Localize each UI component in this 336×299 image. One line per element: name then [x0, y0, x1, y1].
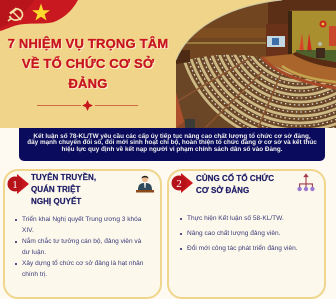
- bullet list: task 1: [15, 216, 143, 278]
- title: VỀ TỔ CHỨC CƠ SỞ: [22, 56, 154, 71]
- summary note panel: [19, 128, 325, 161]
- title: 7 NHIỆM VỤ TRỌNG TÂM: [8, 36, 168, 51]
- heading: task 1: TUYÊN TRUYỀN,: [31, 173, 96, 182]
- number badge 2: [172, 173, 193, 193]
- title: ĐẢNG: [68, 76, 108, 91]
- bullet list: task 1: chính trị.: [22, 271, 47, 278]
- bullet list: task 1: XIV.: [22, 227, 34, 234]
- heading: task 2: [196, 173, 274, 194]
- heading: task 2: CỦNG CỐ TỔ CHỨC: [196, 174, 274, 182]
- panel: task 2: [167, 169, 326, 299]
- title ornament divider: [37, 100, 138, 111]
- header band: beige background: [0, 0, 336, 128]
- bullet list: task 1: dư luận.: [22, 249, 46, 256]
- bullet list: task 2: Nâng cao chất lượng đảng viên.: [187, 230, 280, 237]
- heading: task 1: [31, 172, 96, 206]
- bullet list: task 2: Thực hiện Kết luận số 58-KL/TW.: [187, 215, 284, 222]
- header photo: assembly hall: [176, 0, 336, 128]
- bullet list: task 1: Nắm chắc tư tưởng cán bộ, đảng viên và: [22, 238, 141, 245]
- flag with hammer and sickle and star: [0, 0, 78, 31]
- wall: [182, 6, 263, 60]
- heading: task 1: QUÁN TRIỆT: [31, 185, 80, 194]
- number badge 1: [8, 174, 29, 194]
- aisles: [176, 58, 280, 128]
- title: [8, 36, 168, 91]
- bullet list: task 2: [180, 215, 298, 252]
- stage floor: [262, 54, 336, 85]
- summary note panel: đẩy mạnh chuyển đổi số, đổi mới sinh hoạt chi bộ, hoàn thiện tổ chức đảng ở cơ sở và kết thúc: [27, 139, 317, 146]
- icon: speaker at podium: [136, 176, 154, 192]
- bullet list: task 1: Triển khai Nghị quyết Trung ương 3 khóa: [22, 216, 141, 223]
- summary note panel: hiệu lực quy định về kết nạp người vi phạm chính sách dân số vào Đảng.: [62, 146, 282, 153]
- summary note panel: Kết luận số 78-KL/TW yêu cầu các cấp ủy tiếp tục nâng cao chất lượng tổ chức cơ sở đảng,: [33, 132, 311, 140]
- icon: star: [32, 4, 50, 20]
- panel: task 1: [3, 169, 162, 299]
- heading: task 1: NGHỊ QUYẾT: [31, 197, 81, 206]
- number badge 2: 2: [176, 178, 182, 190]
- number badge 1: 1: [12, 179, 18, 191]
- icon: hammer and sickle: [8, 8, 23, 21]
- bullet list: task 2: Đổi mới công tác phát triển đảng viên.: [187, 245, 298, 252]
- icon: organisation tree: [297, 174, 315, 192]
- seating rows: [184, 54, 336, 128]
- heading: task 2: CƠ SỞ ĐẢNG: [196, 186, 249, 194]
- bullet list: task 1: Xây dựng tổ chức cơ sở đảng là hạt nhân: [22, 260, 143, 267]
